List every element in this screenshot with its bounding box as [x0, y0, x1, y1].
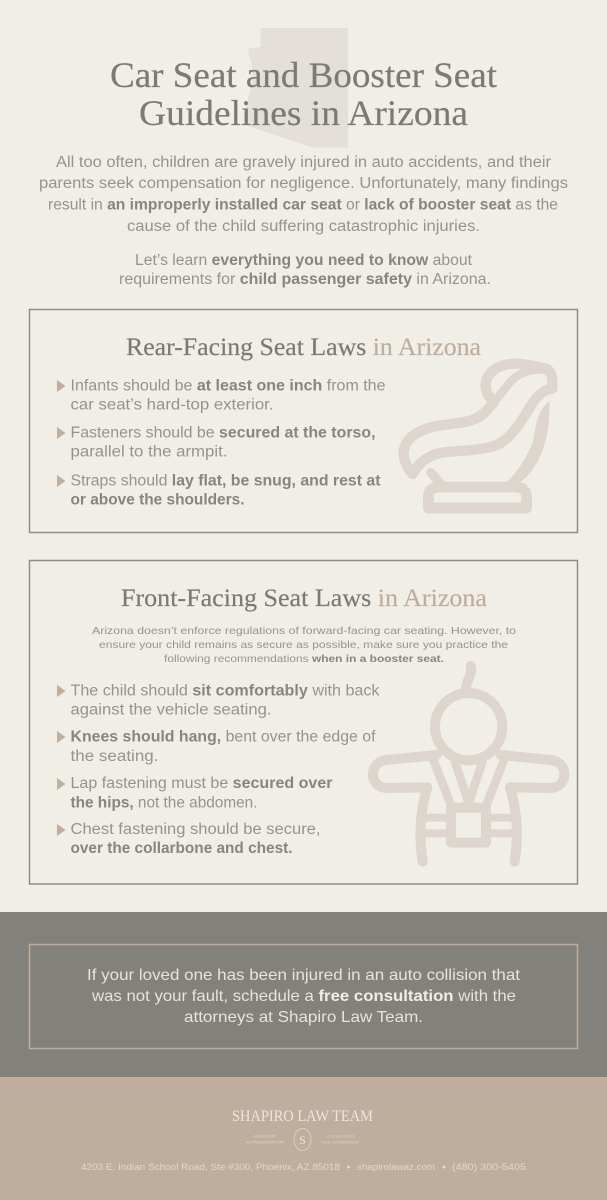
logo tagline: AND EXPERIENCE	[322, 1140, 359, 1144]
bullet 1: The child should sit comfortably with back	[70, 682, 380, 700]
panel intro text: ensure your child remains as secure as possible, make sure you practice the	[99, 639, 508, 651]
icon: child in harness	[373, 666, 564, 862]
panel intro text: Arizona doesn’t enforce regulations of forward-facing car seating. However, to	[92, 625, 516, 637]
bullet 1	[57, 682, 380, 718]
call to action text: was not your fault, schedule a free consultation with the	[91, 988, 516, 1005]
bullet list: rear-facing	[57, 378, 386, 508]
bullet 2: the seating.	[70, 748, 158, 765]
bullet 3	[57, 775, 332, 812]
intro text block: Let’s learn everything you need to know about	[135, 252, 473, 269]
intro text block: requirements for child passenger safety in Arizona.	[119, 271, 491, 288]
panel intro text	[92, 625, 516, 665]
logo tagline: SUPERIOR	[254, 1134, 276, 1138]
footer	[0, 1077, 607, 1200]
logo emblem	[294, 1128, 311, 1150]
bullet 2: parallel to the armpit.	[70, 444, 228, 460]
bullet list: front-facing	[57, 682, 380, 857]
logo tagline	[246, 1134, 359, 1144]
contact line: 4203 E. Indian School Road, Ste #300, Phoenix, AZ 85018	[81, 1162, 340, 1172]
logo wordmark: SHAPIRO LAW TEAM	[232, 1108, 373, 1125]
bullet 3: or above the shoulders.	[70, 492, 244, 508]
heading: front-facing: Front-Facing Seat Laws in Arizona	[121, 585, 487, 612]
intro text block: result in an improperly installed car seat or lack of booster seat as the	[48, 196, 558, 214]
panel: rear-facing seat laws	[30, 310, 578, 532]
intro text block: parents seek compensation for negligence. Unfortunately, many findings	[39, 175, 568, 192]
bullet 1: against the vehicle seating.	[70, 702, 272, 718]
contact line	[81, 1162, 526, 1172]
intro text block: cause of the child suffering catastrophic injuries.	[127, 218, 480, 235]
logo tagline: EXCELLENCE	[327, 1134, 355, 1138]
call to action text: If your loved one has been injured in an auto collision that	[87, 967, 521, 984]
call to action text: attorneys at Shapiro Law Team.	[184, 1009, 423, 1026]
contact line: (480) 300-5405	[452, 1162, 526, 1172]
icon: car seat	[403, 364, 552, 508]
panel: front-facing seat laws	[30, 560, 578, 884]
call to action text	[87, 967, 521, 1026]
logo emblem: S	[299, 1133, 306, 1147]
call to action band	[0, 912, 607, 1077]
heading: rear-facing: Rear-Facing Seat Laws in Arizona	[126, 334, 481, 361]
bullet 2	[57, 728, 376, 765]
bullet 3	[57, 472, 380, 508]
title	[110, 55, 497, 133]
bullet 4	[57, 821, 320, 857]
title: Car Seat and Booster Seat	[110, 55, 497, 95]
bullet 4: over the collarbone and chest.	[70, 840, 292, 857]
panel intro text: following recommendations when in a booster seat.	[164, 653, 444, 665]
bullet 1	[57, 378, 386, 414]
bullet 3: Straps should lay flat, be snug, and rest at	[70, 472, 380, 490]
bullet 3: Lap fastening must be secured over	[70, 775, 332, 792]
title: Guidelines in Arizona	[139, 93, 468, 133]
intro text block: All too often, children are gravely injured in auto accidents, and their	[56, 154, 551, 171]
bullet 3: the hips, not the abdomen.	[70, 794, 258, 812]
intro text block	[39, 154, 568, 288]
bullet 2: Knees should hang, bent over the edge of	[70, 728, 376, 746]
bullet 2	[57, 424, 376, 460]
logo tagline: REPRESENTATION	[246, 1140, 284, 1144]
contact line: shapirolawaz.com	[357, 1162, 435, 1172]
bullet 4: Chest fastening should be secure,	[70, 821, 320, 838]
bullet 2: Fasteners should be secured at the torso,	[70, 424, 376, 442]
bullet 1: car seat’s hard-top exterior.	[70, 396, 274, 414]
icon: Arizona state silhouette	[244, 28, 348, 148]
bullet 1: Infants should be at least one inch from the	[70, 378, 386, 394]
